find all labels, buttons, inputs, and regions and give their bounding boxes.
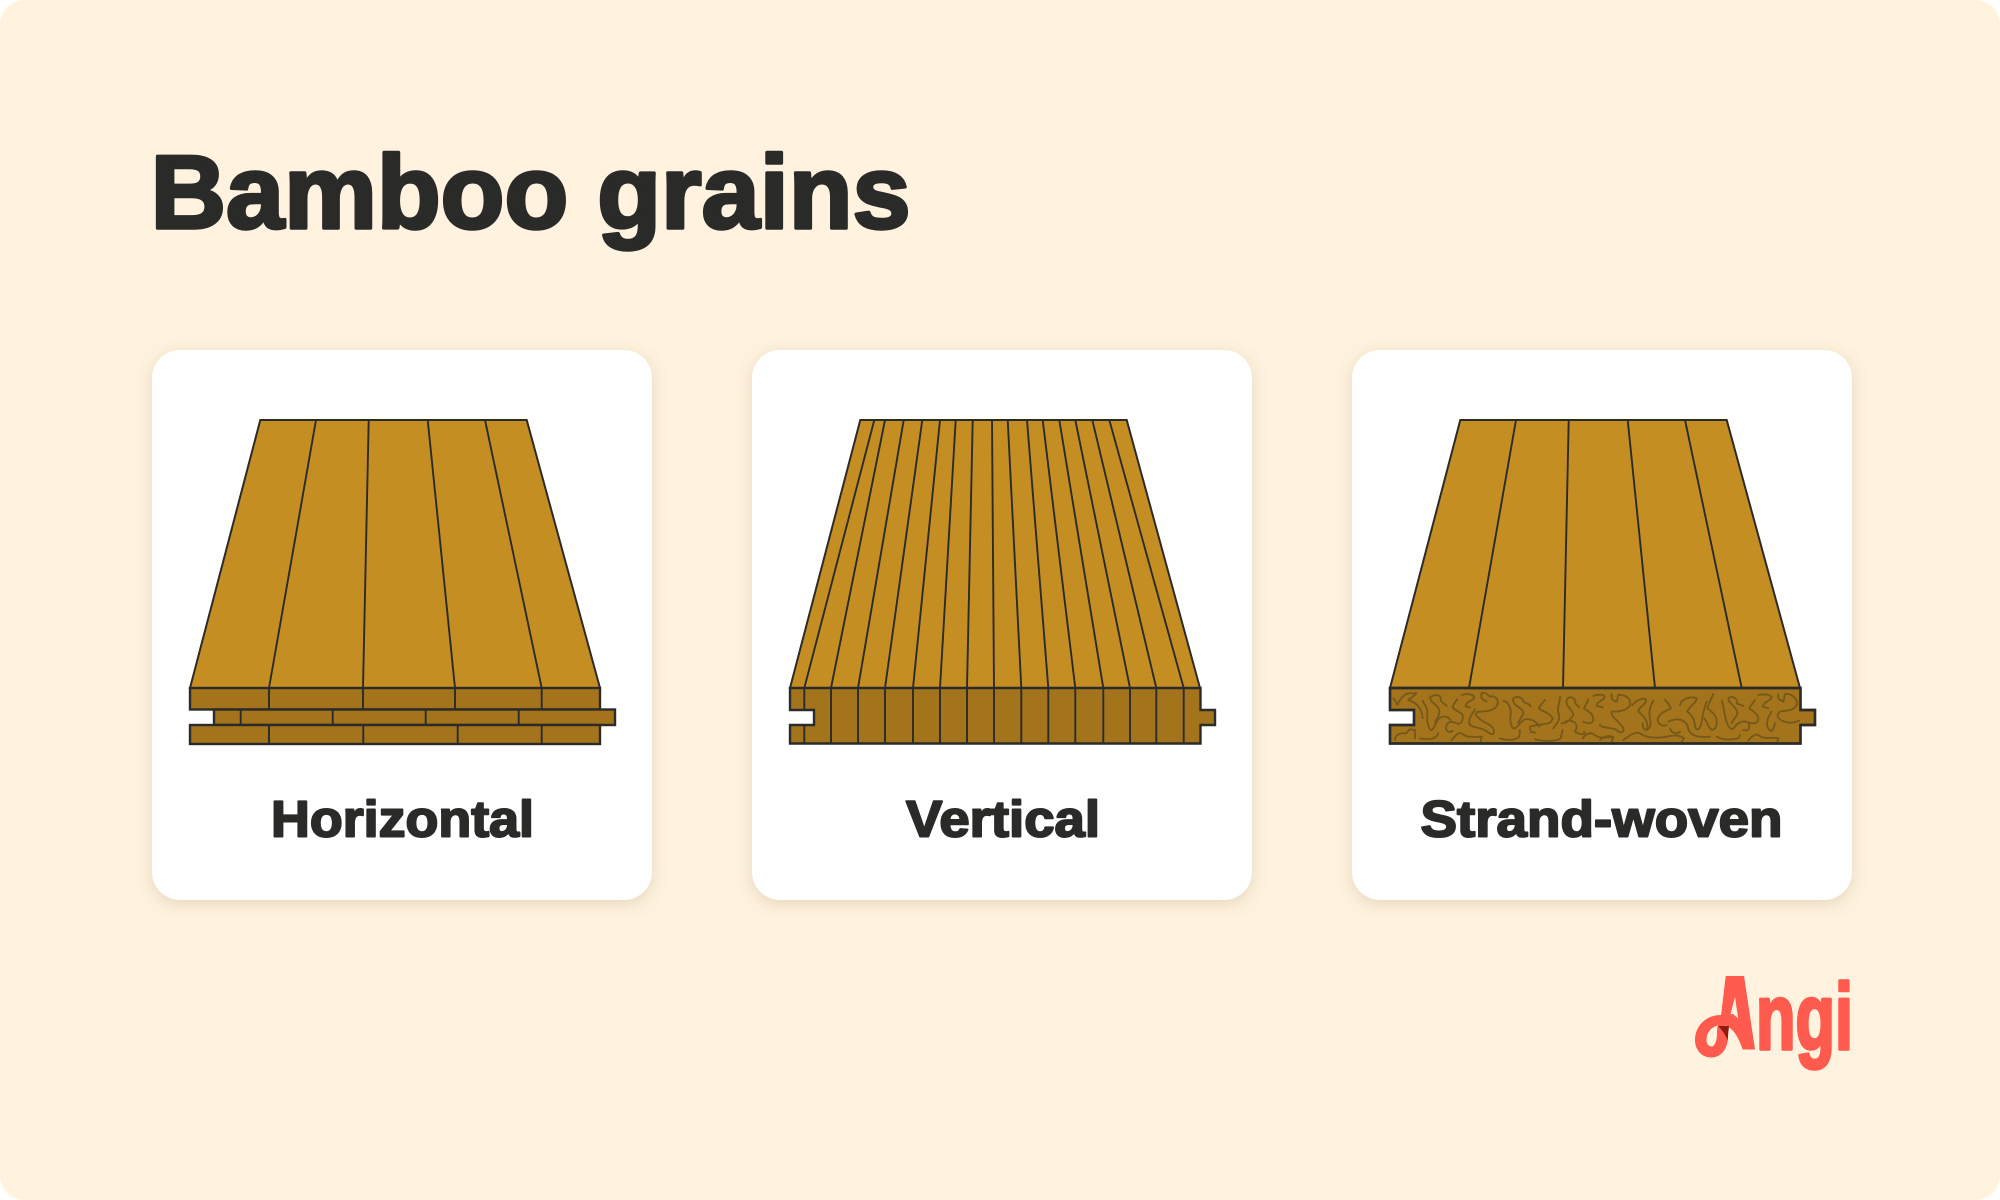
panel: vertical	[752, 350, 1252, 900]
plank front layers	[190, 688, 615, 744]
logo: Angi	[1695, 976, 1850, 1071]
illustration: vertical grain plank	[790, 420, 1215, 744]
plank front with groove and tongue	[1390, 688, 1815, 744]
illustration: horizontal grain plank	[190, 420, 615, 744]
illustration: strand-woven plank	[1390, 420, 1815, 744]
card: vertical	[752, 350, 1252, 900]
panel: strand-woven	[1352, 350, 1852, 900]
woven strand texture	[1393, 693, 1807, 742]
plank top surface	[1390, 420, 1800, 688]
label: horizontal: Horizontal	[271, 790, 534, 848]
logo letter A: A	[1713, 954, 1757, 1072]
logo fold	[1718, 1026, 1729, 1041]
panel: horizontal	[152, 350, 652, 900]
card: horizontal	[152, 350, 652, 900]
logo letter A legs	[1721, 976, 1755, 1050]
label: vertical: Vertical	[906, 790, 1100, 848]
plank front with groove and tongue	[790, 688, 1215, 744]
plank top surface	[190, 420, 600, 688]
logo letters ngi: ngi	[1756, 964, 1853, 1069]
card: strand-woven	[1352, 350, 1852, 900]
label: strand-woven: Strand-woven	[1420, 790, 1782, 848]
plank top surface	[790, 420, 1200, 688]
title: Bamboo grains	[151, 135, 911, 251]
plank front outline and dividers	[1390, 688, 1815, 744]
logo swoosh	[1695, 1014, 1755, 1058]
